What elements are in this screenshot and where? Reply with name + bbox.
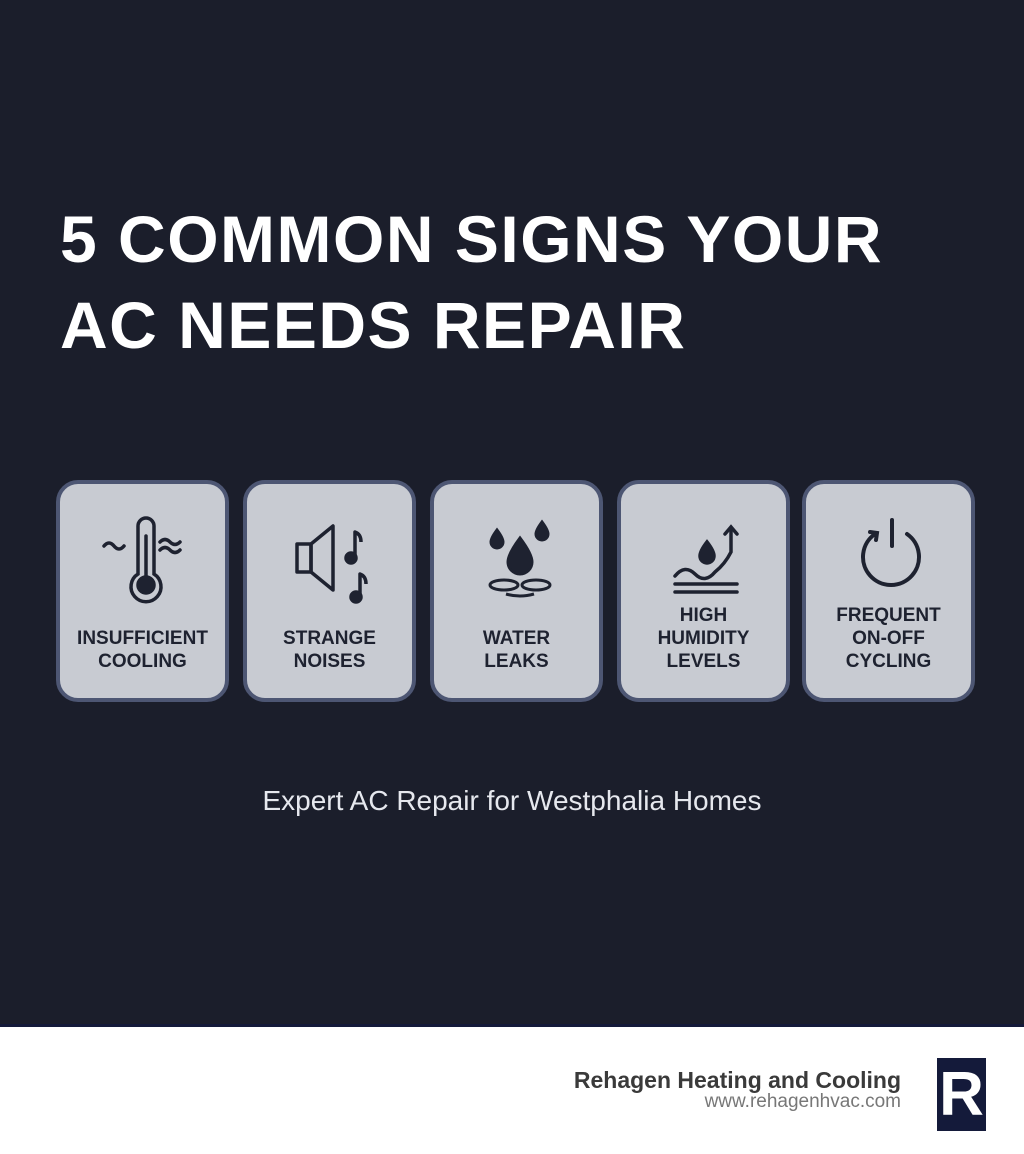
label: NOISES: [294, 651, 365, 672]
label: [836, 605, 941, 672]
label: WATER: [483, 628, 550, 649]
label: [77, 628, 208, 672]
card: insufficient cooling: [56, 480, 229, 702]
label: [658, 605, 749, 672]
company name: Rehagen Heating and Cooling: [574, 1067, 901, 1093]
label: ON-OFF: [852, 628, 925, 649]
title: 5 COMMON SIGNS YOUR: [60, 202, 883, 276]
card: high humidity: [617, 480, 790, 702]
logo: R: [939, 1060, 984, 1129]
label: COOLING: [98, 651, 187, 672]
icon: water drops: [488, 520, 552, 598]
label: [283, 628, 376, 672]
title: [60, 202, 883, 362]
card: frequent cycling: [802, 480, 975, 702]
label: LEAKS: [484, 651, 549, 672]
title: AC NEEDS REPAIR: [60, 288, 686, 362]
card: strange noises: [243, 480, 416, 702]
label: FREQUENT: [836, 605, 941, 626]
footer: [0, 1024, 1024, 1154]
subtitle: Expert AC Repair for Westphalia Homes: [262, 785, 762, 816]
card: water leaks: [430, 480, 603, 702]
label: STRANGE: [283, 628, 376, 649]
icon: thermometer: [102, 516, 182, 604]
label: CYCLING: [846, 651, 931, 672]
icon: humidity rising: [673, 524, 739, 594]
label: HIGH: [680, 605, 727, 626]
website: www.rehagenhvac.com: [705, 1091, 901, 1112]
label: INSUFFICIENT: [77, 628, 208, 649]
label: LEVELS: [667, 651, 740, 672]
icon: power: [861, 518, 921, 587]
label: [482, 628, 550, 672]
label: HUMIDITY: [658, 628, 749, 649]
icon: speaker with notes: [295, 524, 368, 604]
